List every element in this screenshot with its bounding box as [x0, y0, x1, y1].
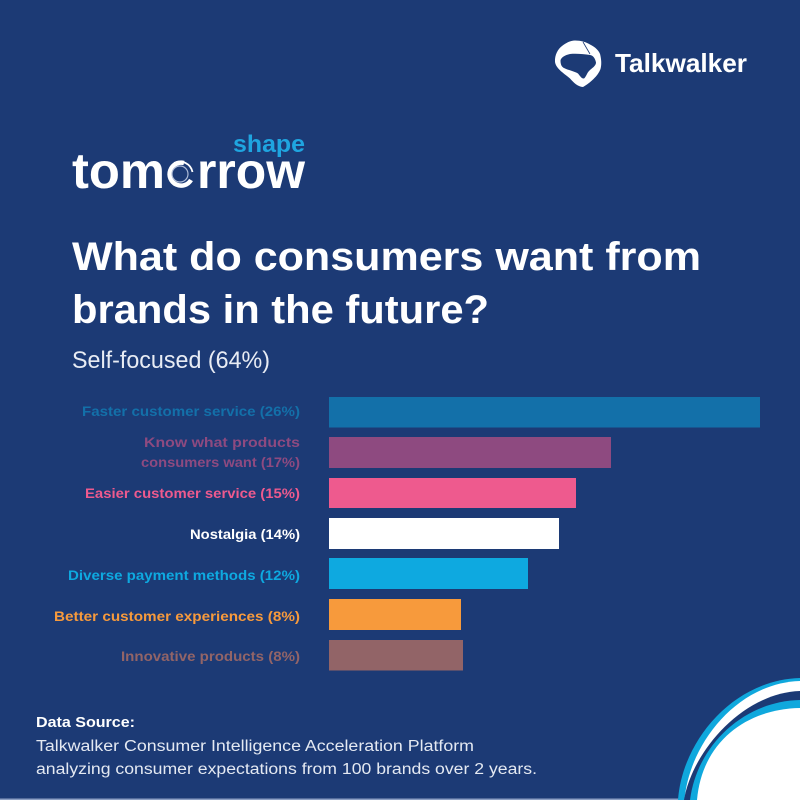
wordmark: Talkwalker: [615, 48, 747, 78]
subtitle: Self-focused (64%): [72, 347, 270, 374]
row: Better customer experiences: [54, 599, 461, 630]
corner arcs: [678, 678, 800, 800]
row: Faster customer service: [82, 397, 760, 428]
title: What do consumers want from: [72, 235, 701, 279]
icon: swirl in tomorrow: [170, 162, 192, 186]
row: Diverse payment methods: [68, 558, 528, 589]
row: Innovative products: [121, 640, 463, 670]
data source: [36, 714, 537, 778]
tomorrow word: rrow: [197, 143, 305, 199]
tomorrow word: o: [168, 143, 199, 199]
row: Innovative products: Innovative products (8%): [121, 648, 300, 664]
title: [72, 235, 701, 332]
icon: Talkwalker mark: [555, 40, 601, 87]
row: Nostalgia: Nostalgia (14%): [190, 526, 300, 542]
row: Know what products consumers want: consumers want (17%): [141, 454, 300, 470]
bar chart: [54, 397, 760, 670]
shape word: shape: [233, 131, 305, 158]
row: Better customer experiences: Better customer experiences (8%): [54, 608, 300, 624]
data source: Data Source:: [36, 714, 135, 731]
row: Diverse payment methods: Diverse payment methods (12%): [68, 567, 300, 583]
logo: shape tomorrow: [72, 131, 305, 199]
row: Nostalgia: [190, 518, 559, 549]
logo: Talkwalker: [555, 40, 747, 87]
row: Easier customer service: [85, 478, 576, 508]
row: Easier customer service: Easier customer service (15%): [85, 485, 300, 501]
tomorrow word: tom: [72, 143, 165, 199]
data source: analyzing consumer expectations from 100 brands over 2 years.: [36, 761, 537, 778]
row: Know what products consumers want: [141, 434, 611, 470]
row: Know what products consumers want: Know what products: [144, 434, 300, 450]
data source: Talkwalker Consumer Intelligence Acceleration Platform: [36, 738, 474, 755]
title: brands in the future?: [72, 288, 489, 332]
row: Faster customer service: Faster customer service (26%): [82, 403, 300, 419]
